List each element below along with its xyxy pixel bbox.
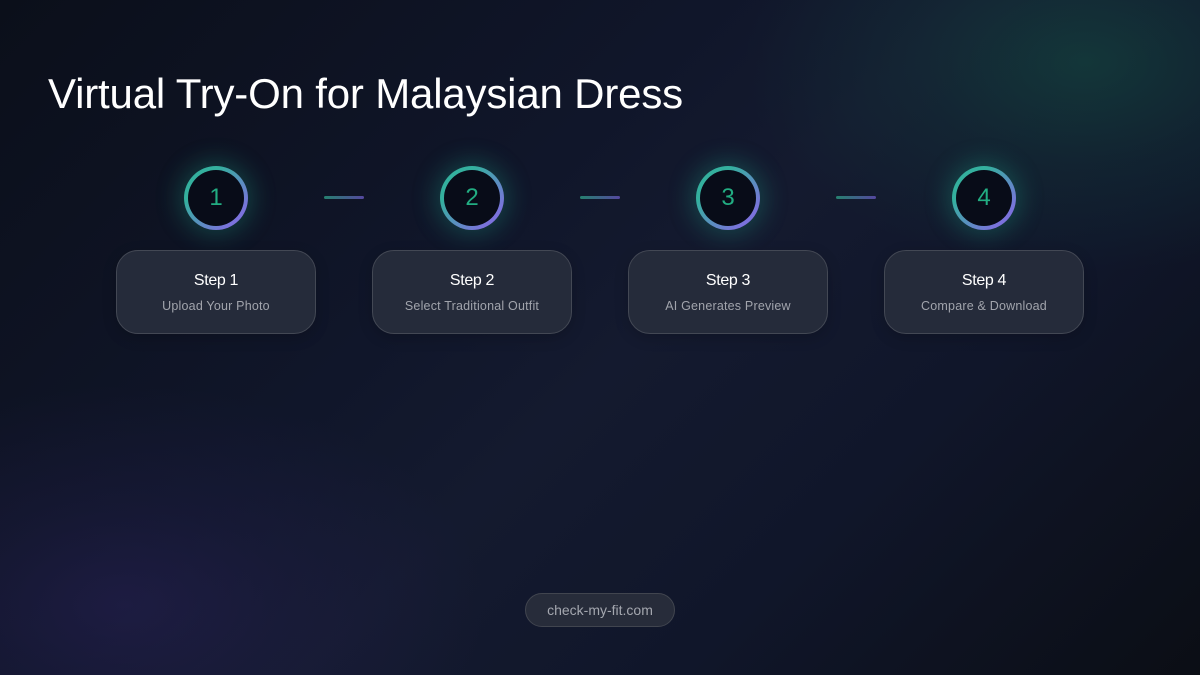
step 3 heading: Step 3	[706, 272, 750, 289]
card: step 2	[372, 250, 572, 334]
step 3 description: AI Generates Preview	[665, 299, 791, 313]
step 4 description: Compare & Download	[921, 299, 1047, 313]
step 4 heading: Step 4	[962, 272, 1006, 289]
connector 2 to 3	[580, 196, 620, 199]
step 2 number badge: 2	[465, 184, 479, 211]
card: step 1	[116, 250, 316, 334]
card: step 3	[628, 250, 828, 334]
step 1 heading: Step 1	[194, 272, 238, 289]
step 1 number badge	[184, 166, 248, 230]
website pill	[525, 593, 675, 627]
step 2 heading: Step 2	[450, 272, 494, 289]
step 2 number badge	[440, 166, 504, 230]
card: step 4	[884, 250, 1084, 334]
step 3 number badge: 3	[721, 184, 735, 211]
title: Virtual Try-On for Malaysian Dress	[48, 70, 683, 117]
step 1 number badge: 1	[209, 184, 223, 211]
step 4 number badge	[952, 166, 1016, 230]
step 3 number badge	[696, 166, 760, 230]
connector 3 to 4	[836, 196, 876, 199]
step 4 number badge: 4	[977, 184, 991, 211]
connector 1 to 2	[324, 196, 364, 199]
website pill: check-my-fit.com	[547, 602, 653, 618]
step 2 description: Select Traditional Outfit	[405, 299, 539, 313]
step 1 description: Upload Your Photo	[162, 299, 270, 313]
